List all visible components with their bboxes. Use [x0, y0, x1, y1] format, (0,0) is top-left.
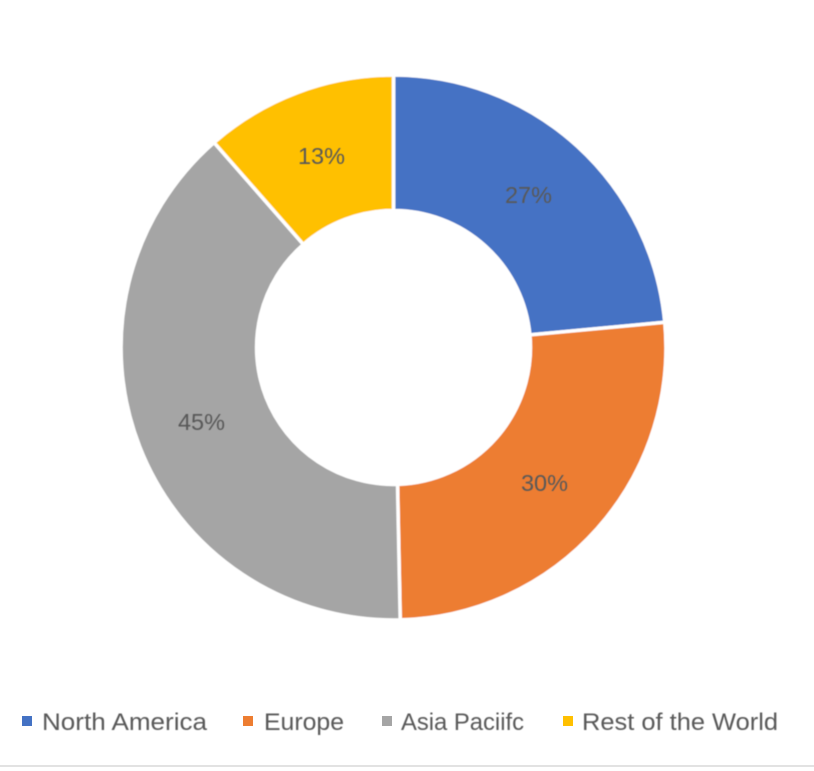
- slice: North America 27%: [394, 75, 665, 335]
- label: 30%: 30%: [521, 470, 568, 496]
- legend item: Europe: Europe: [264, 709, 344, 736]
- slice: Asia Pacific 45%: [121, 142, 400, 620]
- legend item: North America: North America: [42, 709, 208, 736]
- label: 27%: 27%: [505, 182, 552, 208]
- legend item: Asia Pacific: Asia Paciifc: [401, 709, 524, 736]
- legend: [22, 709, 778, 736]
- slice: Europe 30%: [398, 322, 666, 620]
- label: 13%: 13%: [298, 143, 345, 169]
- donut chart: [121, 75, 666, 620]
- legend item: Rest of the World: Rest of the World: [582, 709, 778, 736]
- label: 45%: 45%: [178, 409, 225, 435]
- data labels: [178, 143, 568, 496]
- slice: Rest of the World 13%: [214, 75, 394, 244]
